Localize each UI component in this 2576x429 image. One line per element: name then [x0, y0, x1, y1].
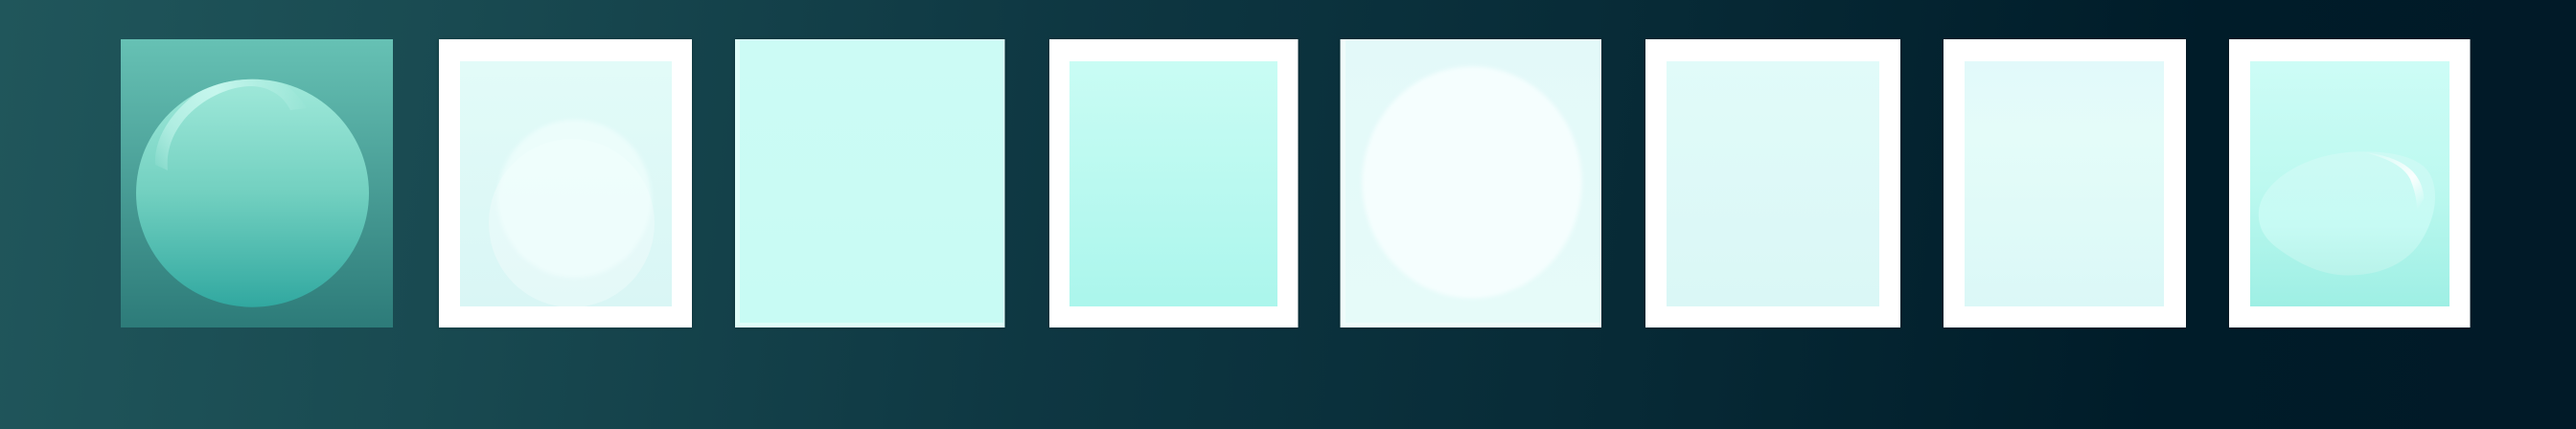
panel 1: teal card with sphere [121, 39, 393, 327]
panel 2: white frame with pale ovals [439, 39, 692, 327]
icon: water blob [2259, 151, 2435, 276]
icon: pale oval [498, 120, 652, 278]
icon: teal oval [136, 77, 369, 307]
icon: faint lower oval [489, 188, 655, 306]
panel 7: white frame with pale fill [1944, 39, 2186, 327]
panel 8: white frame with aqua fill and blob [2229, 39, 2471, 327]
panel 3: pale aqua card [735, 39, 1004, 327]
panel 4: white frame with aqua fill [1049, 39, 1298, 327]
panel 5: pale card with white oval [1340, 39, 1601, 327]
icon: white oval [1363, 67, 1581, 299]
panel 6: white frame with pale fill [1645, 39, 1900, 327]
